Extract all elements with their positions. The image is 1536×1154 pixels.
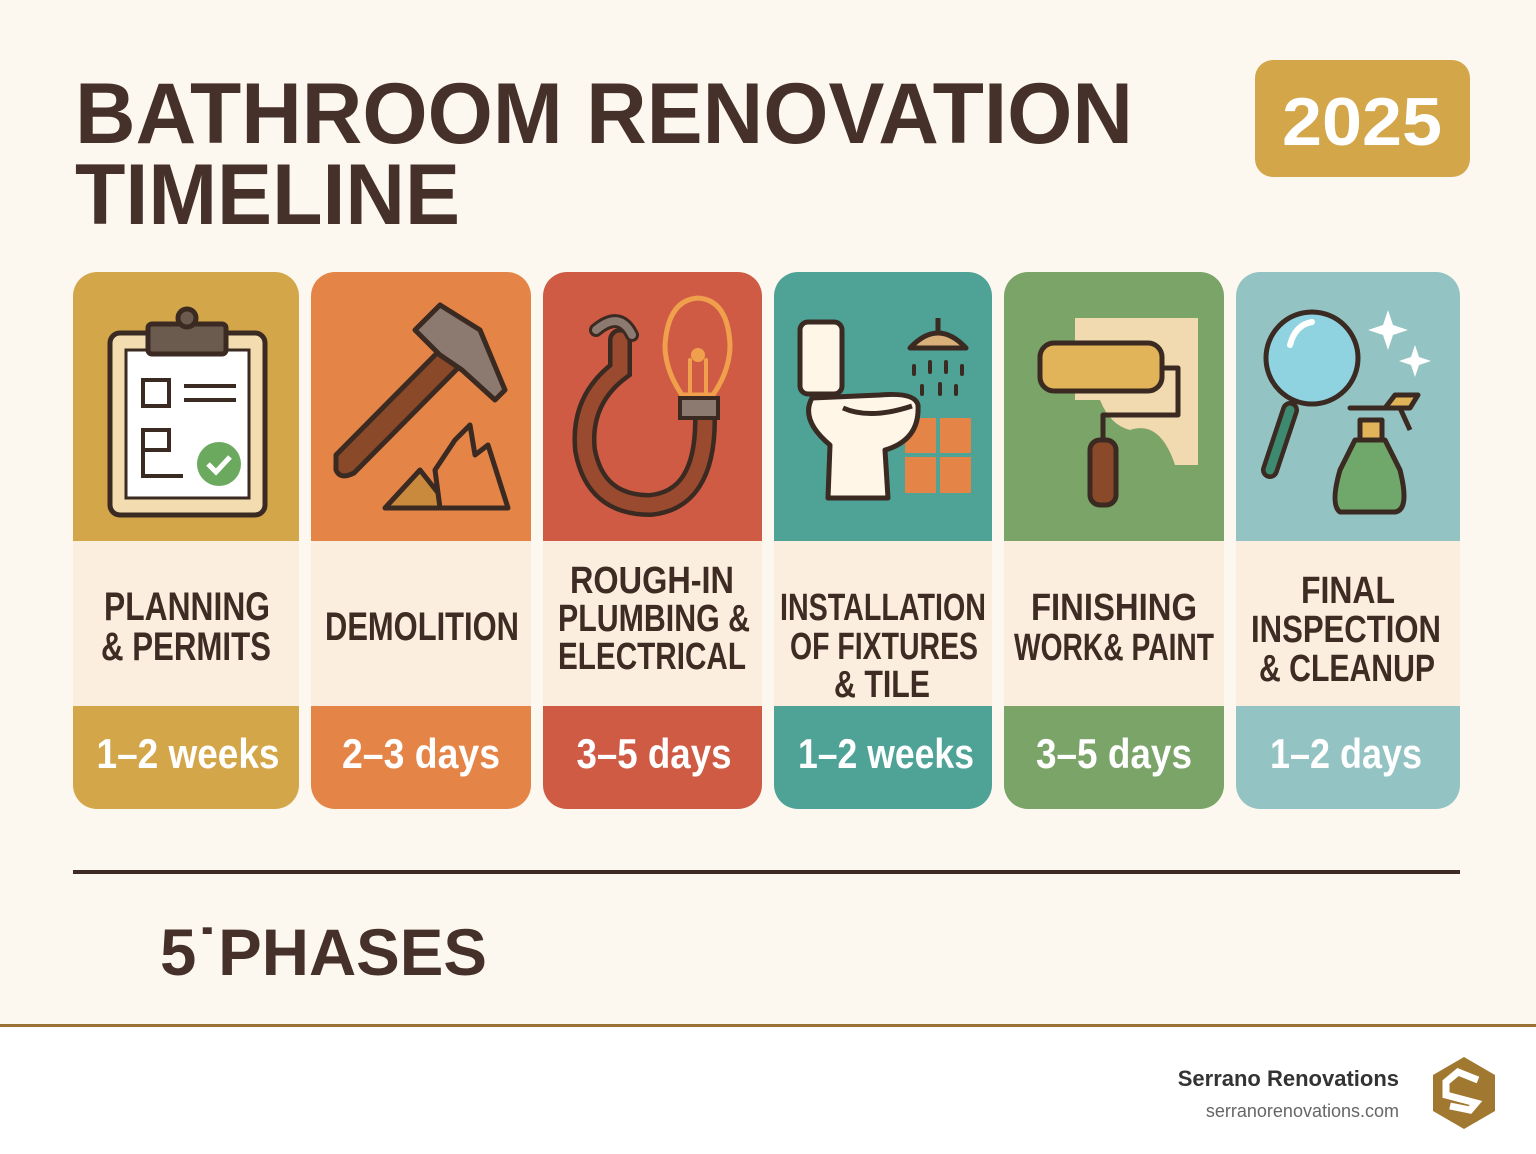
label: finishing: FINISHING — [1031, 587, 1197, 629]
logo — [1433, 1057, 1495, 1129]
label: installation — [780, 587, 986, 706]
icon: clipboard — [110, 309, 265, 515]
label: rough-in: ROUGH-IN — [570, 560, 734, 602]
label: rough-in: ELECTRICAL — [558, 636, 746, 678]
label: installation: & TILE — [834, 664, 930, 706]
card 1: planning — [73, 272, 299, 809]
duration: 3-5 days: 3–5 days — [1036, 730, 1192, 777]
label: finishing: WORK& PAINT — [1014, 627, 1214, 669]
label: planning: & PERMITS — [101, 625, 271, 669]
card 6: inspection — [1236, 272, 1460, 809]
card 5: finishing — [1004, 272, 1224, 809]
footer brand: serranorenovations.com — [1206, 1101, 1399, 1121]
duration: 1-2 weeks: 1–2 weeks — [96, 730, 280, 777]
title: BATHROOM RENOVATION — [75, 66, 1133, 162]
duration: 2-3 days: 2–3 days — [342, 730, 500, 777]
label: planning: PLANNING — [104, 585, 270, 629]
label: rough-in — [558, 560, 750, 678]
label: final inspection: INSPECTION — [1251, 609, 1441, 651]
icon: toilet, shower, tile — [800, 318, 971, 498]
duration: 3-5 days: 3–5 days — [576, 730, 732, 777]
card 2: demolition — [311, 272, 531, 809]
duration: 1-2 weeks: 1–2 weeks — [798, 730, 974, 777]
label: rough-in: PLUMBING & — [558, 598, 750, 640]
label: demolition: DEMOLITION — [325, 605, 519, 649]
icon: magnifier and spray — [1266, 310, 1431, 512]
duration: 1-2 days: 1–2 days — [1270, 730, 1422, 777]
icon: paint roller — [1040, 318, 1198, 505]
icon: pipe and bulb — [584, 298, 730, 505]
year badge — [1255, 60, 1470, 177]
footer brand — [1178, 1066, 1399, 1121]
label: finishing — [1014, 587, 1214, 669]
label: installation: INSTALLATION — [780, 587, 986, 629]
title: TIMELINE — [75, 147, 460, 243]
label: final inspection — [1251, 570, 1441, 690]
card 4: fixtures — [774, 272, 992, 809]
label: planning — [101, 585, 271, 669]
year badge: 2025 — [1282, 84, 1442, 160]
label: installation: OF FIXTURES — [790, 626, 978, 668]
label: final inspection: FINAL — [1301, 570, 1395, 612]
label: final inspection: & CLEANUP — [1259, 648, 1435, 690]
footer brand: Serrano Renovations — [1178, 1066, 1399, 1091]
card 3: rough-in — [543, 272, 762, 809]
title — [75, 66, 1133, 243]
phases heading: 5˙PHASES — [160, 915, 487, 989]
icon: hammer — [336, 305, 508, 508]
